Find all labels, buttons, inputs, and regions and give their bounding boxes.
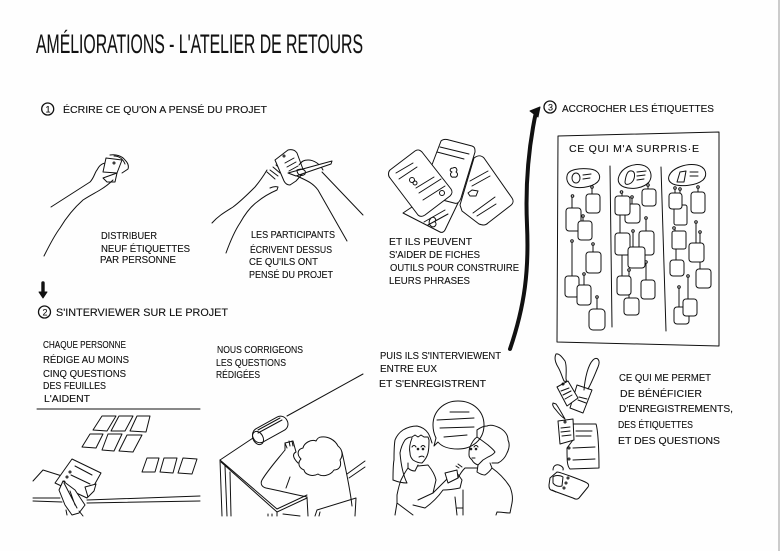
text: distribuer: PAR PERSONNE [100, 254, 176, 266]
text: fiches outils: LEURS PHRASES [389, 275, 470, 287]
text: distribuer: NEUF ÉTIQUETTES [101, 242, 190, 255]
woman [393, 426, 462, 515]
tags [553, 354, 599, 419]
section 2 heading: S'INTERVIEWER SUR LE PROJET [56, 307, 228, 319]
text: chaque personne [43, 339, 129, 405]
text: chaque personne: RÉDIGE AU MOINS [43, 353, 129, 366]
text: les participants: LES PARTICIPANTS [251, 229, 335, 241]
recorder in hand [445, 464, 462, 483]
text: fiches outils: ET ILS PEUVENT [389, 236, 473, 248]
text: puis ils s'interviewent: ET S'ENREGISTRENT [379, 378, 487, 390]
board heading: CE QUI M'A SURPRIS·E [569, 143, 699, 155]
section 1 heading: ÉCRIRE CE QU'ON A PENSÉ DU PROJET [63, 103, 268, 116]
illustration: tool sheets [388, 139, 513, 232]
section 2 heading: 2 [42, 308, 48, 318]
text: les participants: CE QU'ILS ONT [249, 256, 319, 268]
man [455, 425, 512, 515]
text: ce qui me permet: DE BÉNÉFICIER [620, 387, 702, 400]
column 3 labels [669, 186, 711, 324]
text: distribuer: DISTRIBUER [101, 230, 157, 242]
text: les participants: ÉCRIVENT DESSUS [250, 243, 332, 256]
title: AMÉLIORATIONS - L'ATELIER DE RETOURS [36, 29, 363, 59]
column 2 labels [615, 184, 656, 315]
text: nous corrigeons: LES QUESTIONS [216, 357, 286, 369]
illustration: two people interviewing [393, 401, 512, 515]
category blobs [567, 165, 706, 188]
text: distribuer [100, 230, 190, 266]
text: nous corrigeons: RÉDIGÉES [216, 368, 260, 381]
speech bubble [433, 401, 484, 449]
text: fiches outils: S'AIDER DE FICHES [389, 249, 480, 261]
text: nous corrigeons [216, 344, 303, 381]
text: nous corrigeons: NOUS CORRIGEONS [217, 344, 303, 356]
text: fiches outils [389, 236, 519, 287]
text: puis ils s'interviewent: PUIS ILS S'INTERVIEWENT [380, 350, 502, 362]
text: chaque personne: DES FEUILLES [43, 380, 106, 392]
text: chaque personne: L'AIDENT [44, 393, 91, 405]
section 3 heading: ACCROCHER LES ÉTIQUETTES [562, 102, 714, 115]
text: ce qui me permet: CE QUI ME PERMET [619, 372, 712, 384]
text: les participants [249, 229, 335, 281]
text: ce qui me permet: ET DES QUESTIONS [618, 435, 720, 447]
text: ce qui me permet [618, 372, 733, 447]
illustration: table with cards and hand writing [33, 409, 200, 516]
text: fiches outils: OUTILS POUR CONSTRUIRE [390, 262, 519, 274]
audio recorder [549, 465, 589, 499]
section 3 heading: 3 [548, 102, 553, 112]
text: chaque personne: CHAQUE PERSONNE [43, 339, 126, 351]
illustration: labels, sheet and recorder [549, 354, 599, 499]
text: ce qui me permet: DES ÉTIQUETTES [618, 418, 693, 431]
illustration: string with labels, person at table [220, 374, 365, 516]
thick arrow: to step 3 [510, 107, 540, 349]
text: ce qui me permet: D'ENREGISTREMENTS, [619, 403, 733, 415]
text: chaque personne: CINQ QUESTIONS [43, 368, 126, 380]
illustration: writing on a label [212, 150, 363, 253]
panel: label board [557, 132, 719, 346]
sheet [558, 419, 599, 469]
text: les participants: PENSÉ DU PROJET [249, 268, 333, 281]
arrow: down to step 2 [39, 283, 47, 298]
section 1 heading: 1 [46, 104, 51, 114]
column 1 labels [565, 186, 605, 330]
text: puis ils s'interviewent [379, 350, 502, 390]
illustration: hand holding labels [44, 155, 128, 256]
text: puis ils s'interviewent: ENTRE EUX [380, 363, 437, 375]
